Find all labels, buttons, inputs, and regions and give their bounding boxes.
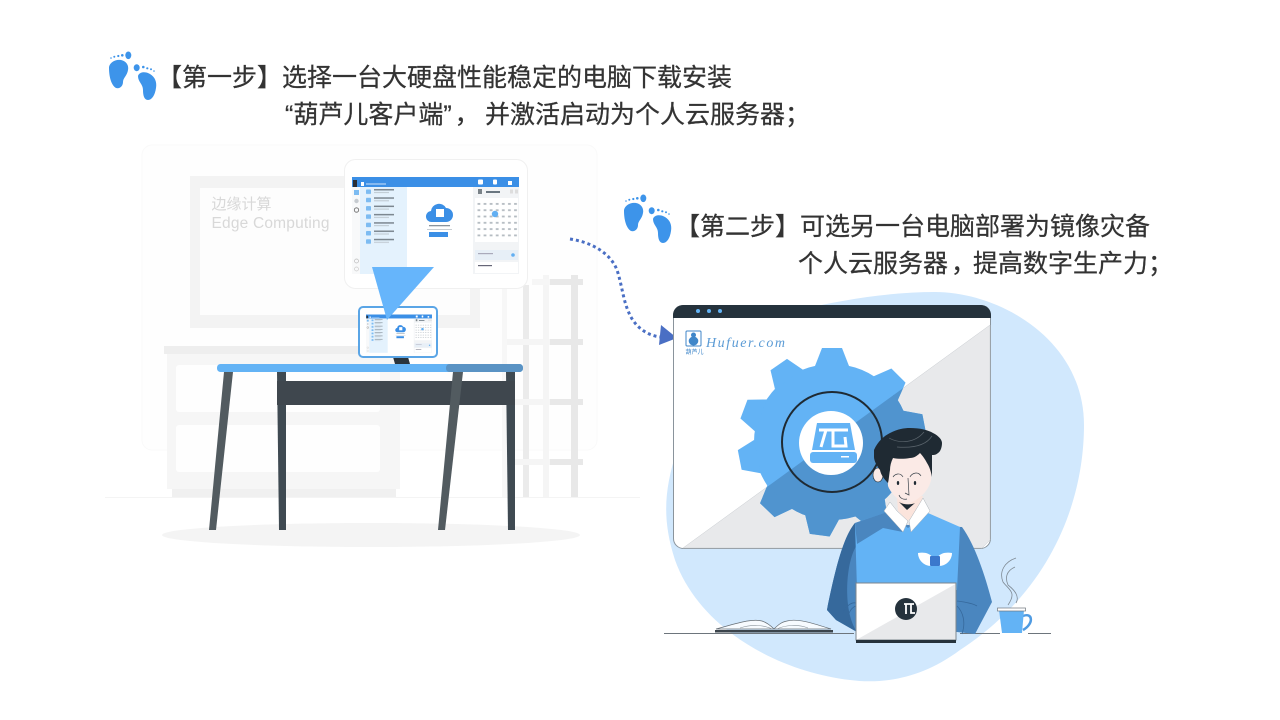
badge: winged logo <box>918 553 952 566</box>
eyes <box>897 481 916 485</box>
heading: step two: 提高数字生产力； <box>973 250 1173 278</box>
window title bar <box>673 305 991 318</box>
gear <box>736 348 928 537</box>
ghost wall panel <box>142 145 597 450</box>
logo: hulu <box>686 331 785 356</box>
window grey diagonal <box>683 325 990 548</box>
coffee cup <box>998 558 1031 633</box>
heading: step one: “葫芦儿客户端”， <box>285 101 480 129</box>
open book <box>715 620 833 632</box>
background illustration: edge computing room <box>105 145 640 547</box>
icon: hard disk <box>810 423 857 463</box>
gear centre disc <box>799 411 863 475</box>
cup rim <box>998 608 1026 611</box>
heading: step two: 个人云服务器， <box>798 250 976 278</box>
tablet stand <box>393 357 410 364</box>
icon: footprints step one <box>109 52 156 100</box>
brows, nose, smile <box>893 473 921 499</box>
rear desk legs <box>277 372 515 530</box>
enlarged client screenshot panel <box>344 160 528 288</box>
ghost label: edge computing: Edge Computing <box>212 215 330 232</box>
background blob <box>666 292 1084 681</box>
client app window <box>352 177 519 274</box>
person <box>827 428 992 634</box>
desk <box>209 364 523 530</box>
beard <box>899 502 915 510</box>
neck <box>897 496 923 521</box>
cup handle <box>1023 615 1031 630</box>
heading: step one <box>157 64 810 129</box>
steam <box>1002 558 1017 605</box>
floor shadow <box>162 523 580 547</box>
laptop logo <box>895 598 917 620</box>
ghost label: edge computing <box>212 195 330 232</box>
desk line <box>664 633 1051 634</box>
window dots <box>696 309 722 313</box>
dotted arrow between steps <box>570 239 677 345</box>
heading: step one: 并激活启动为个人云服务器； <box>485 101 810 129</box>
logo: hulu: Hufuer.com <box>705 336 785 351</box>
face <box>886 452 932 504</box>
ear <box>873 468 883 482</box>
cup body <box>999 610 1024 633</box>
vest shadow <box>855 512 903 544</box>
heading: step one: 【第一步】选择一台大硬盘性能稳定的电脑下载安装 <box>157 64 732 92</box>
logo: hulu: 葫芦儿 <box>686 348 704 356</box>
panel card <box>344 160 528 288</box>
hair strands <box>889 432 932 447</box>
laptop diagonal <box>857 584 956 640</box>
icon: footprints step two <box>624 194 671 243</box>
sleeve shadow <box>827 523 857 632</box>
ghost cabinet <box>164 346 400 498</box>
gear dark half <box>760 388 926 536</box>
laptop base <box>856 640 956 643</box>
person vest <box>855 512 960 590</box>
window body <box>674 306 990 548</box>
floor line <box>105 497 640 498</box>
tablet screen <box>366 314 432 353</box>
person sleeves <box>827 523 992 634</box>
ghost shelf <box>502 275 583 498</box>
heading: step two: 【第二步】可选另一台电脑部署为镜像灾备 <box>675 213 1150 241</box>
ghost picture frame <box>190 176 480 328</box>
zoom pointer triangle <box>372 267 434 320</box>
sleeve folds <box>842 601 977 634</box>
desk top <box>217 364 523 372</box>
gear light half <box>736 348 928 537</box>
tablet on desk <box>359 307 437 364</box>
gear ring <box>782 392 882 492</box>
front desk legs <box>209 372 463 530</box>
laptop <box>856 583 956 643</box>
collar <box>884 498 930 532</box>
tablet body <box>359 307 437 357</box>
hair <box>874 428 942 483</box>
heading: step two <box>675 213 1173 278</box>
desk strut <box>277 381 515 405</box>
laptop lid <box>856 583 956 640</box>
browser window <box>673 305 991 548</box>
ghost label: edge computing: 边缘计算 <box>212 195 272 213</box>
